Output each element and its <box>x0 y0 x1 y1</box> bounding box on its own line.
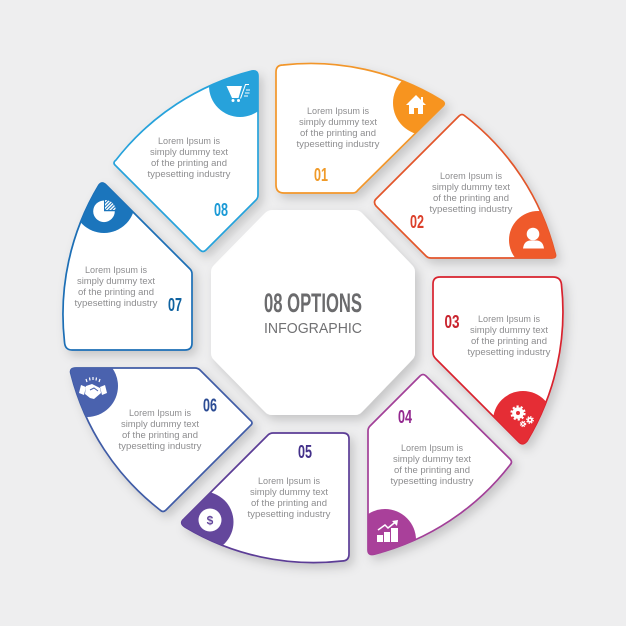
panel 07 <box>63 171 192 350</box>
text 02: typesetting industry <box>430 204 513 214</box>
text 04 <box>390 443 474 486</box>
text 08: simply dummy text <box>150 147 228 157</box>
text 07: of the printing and <box>78 287 154 297</box>
text 08: typesetting industry <box>148 169 231 179</box>
icon: shopping cart <box>226 84 250 102</box>
badge 04 <box>368 509 416 554</box>
panel 02 <box>374 114 567 269</box>
number 07: 07 <box>168 294 182 315</box>
icon: pie chart <box>93 200 116 222</box>
text 05: simply dummy text <box>250 487 328 497</box>
panel 05 <box>172 433 349 563</box>
text 06: typesetting industry <box>118 441 202 451</box>
text 08: Lorem Ipsum is <box>158 136 220 146</box>
text 06: of the printing and <box>122 430 198 440</box>
panel 08 <box>114 55 271 252</box>
badge 08 <box>209 72 258 117</box>
text 04: typesetting industry <box>390 476 474 486</box>
text 05 <box>248 476 331 519</box>
number 05: 05 <box>298 441 312 462</box>
text 08: of the printing and <box>151 158 227 168</box>
text 06 <box>118 408 202 451</box>
number 08: 08 <box>214 199 228 220</box>
text 08 <box>148 136 231 179</box>
text 01: of the printing and <box>300 128 376 138</box>
badge 02 <box>509 211 556 258</box>
text 02: Lorem Ipsum is <box>440 171 502 181</box>
panel 06 <box>56 355 252 512</box>
icon: dollar coin: $ <box>207 514 214 528</box>
panel 01 <box>276 63 457 193</box>
number 06: 06 <box>203 394 217 416</box>
text 07 <box>74 265 158 308</box>
text 02: simply dummy text <box>432 182 510 192</box>
icon: person <box>523 228 544 248</box>
text 04: simply dummy text <box>393 454 471 464</box>
number 02: 02 <box>410 211 424 232</box>
number 03: 03 <box>444 311 460 332</box>
number 04: 04 <box>398 406 412 427</box>
text 03: of the printing and <box>471 336 547 346</box>
icon: growth chart <box>377 520 398 542</box>
text 04: Lorem Ipsum is <box>401 443 463 453</box>
badge 05 <box>182 492 234 545</box>
center subtitle: INFOGRAPHIC <box>264 321 362 337</box>
icon: gears <box>511 406 533 427</box>
text 05: of the printing and <box>251 498 327 508</box>
text 03: simply dummy text <box>470 325 548 335</box>
text 06: simply dummy text <box>121 419 199 429</box>
icon: handshake <box>79 377 107 399</box>
text 04: of the printing and <box>394 465 470 475</box>
text 02: of the printing and <box>433 193 509 203</box>
center title: 08 OPTIONS <box>264 288 362 318</box>
text 03: typesetting industry <box>468 347 551 357</box>
text 03: Lorem Ipsum is <box>478 314 540 324</box>
badge 03 <box>494 391 546 444</box>
badge 07 <box>81 184 133 233</box>
text 01 <box>296 106 380 149</box>
badge 01 <box>393 81 444 134</box>
icon: dollar coin <box>198 508 222 532</box>
text 06: Lorem Ipsum is <box>129 408 191 418</box>
text 03 <box>468 314 551 357</box>
text 05: typesetting industry <box>248 509 331 519</box>
text 02 <box>430 171 513 214</box>
icon: house <box>406 95 426 114</box>
badge 06 <box>71 368 118 417</box>
number 01: 01 <box>314 164 328 185</box>
text 07: Lorem Ipsum is <box>85 265 147 275</box>
text 07: typesetting industry <box>74 298 158 308</box>
text 01: typesetting industry <box>296 139 380 149</box>
panel 04 <box>354 374 512 571</box>
text 07: simply dummy text <box>77 276 155 286</box>
text 01: simply dummy text <box>299 117 377 127</box>
text 01: Lorem Ipsum is <box>307 106 369 116</box>
text 05: Lorem Ipsum is <box>258 476 320 486</box>
central octagon <box>211 210 415 415</box>
panel 03 <box>433 277 563 451</box>
